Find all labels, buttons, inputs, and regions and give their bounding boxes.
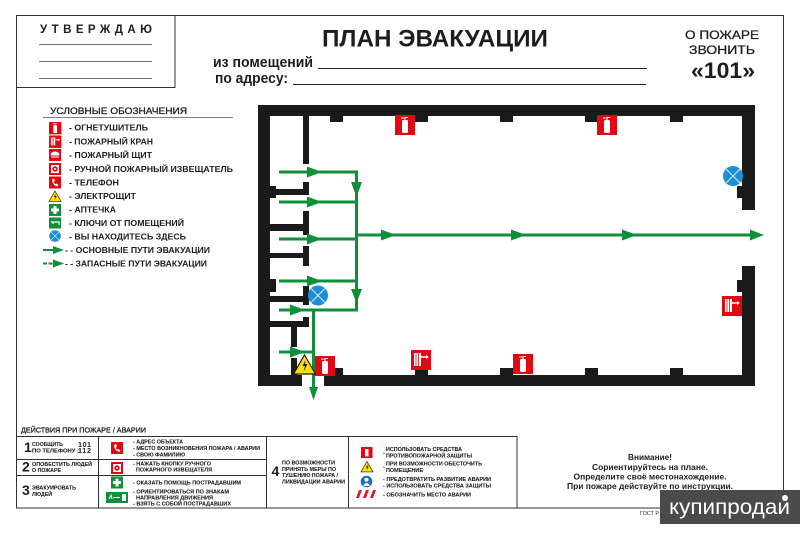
attention note: [567, 452, 733, 491]
step 4 measures: ПРОТИВОПОЖАРНОЙ ЗАЩИТЫ: [386, 452, 473, 460]
panel: legend: [43, 106, 233, 268]
step 3: НАПРАВЛЕНИЯ ДВИЖЕНИЯ: [136, 496, 213, 502]
legend label: extinguisher: - ОГНЕТУШИТЕЛЬ: [69, 122, 148, 132]
approval heading: УТВЕРЖДАЮ: [40, 24, 152, 36]
approval box: [16, 16, 175, 88]
step 4: ПРИНЯТЬ МЕРЫ ПО: [282, 467, 337, 473]
legend icon: electric panel: [49, 191, 61, 201]
step 4: ЛИКВИДАЦИИ АВАРИИ: [282, 479, 345, 485]
step 4: ПО ВОЗМОЖНОСТИ: [282, 460, 335, 466]
step 4 measures: ПРИ ВОЗМОЖНОСТИ ОБЕСТОЧИТЬ: [386, 462, 482, 468]
step 3: 3: [22, 482, 30, 498]
step 1: ПО ТЕЛЕФОНУ :: [32, 448, 79, 454]
legend icon: fire shield: [49, 149, 61, 161]
legend icon: main route: [43, 246, 64, 254]
legend icon: keys: [49, 218, 61, 228]
legend label: main route: - - ОСНОВНЫЕ ПУТИ ЭВАКУАЦИИ: [65, 245, 210, 255]
evacuation routes: [279, 166, 764, 400]
icon: you are here, left: [308, 286, 328, 306]
step 3: - ОРИЕНТИРОВАТЬСЯ ПО ЗНАКАМ: [133, 490, 229, 496]
subtitle fields: [213, 55, 647, 87]
step 4: 4: [272, 463, 280, 479]
step 3: ЛЮДЕЙ: [32, 490, 52, 498]
signature lines: [39, 44, 152, 78]
step 4 measures: -: [383, 464, 385, 470]
step 1: - МЕСТО ВОЗНИКНОВЕНИЯ ПОЖАРА / АВАРИИ: [133, 446, 260, 452]
icon: you are here, right: [723, 166, 743, 186]
arrowheads: main exit route: [381, 230, 764, 240]
attention note: При пожаре действуйте по инструкции.: [567, 481, 733, 491]
fire phone callout: [685, 30, 759, 83]
step 1: - АДРЕС ОБЪЕКТА: [133, 440, 183, 446]
legend icon: first aid: [49, 204, 61, 216]
step 4 measures: - ОБОЗНАЧИТЬ МЕСТО АВАРИИ: [383, 492, 471, 498]
step 2: 2: [22, 458, 30, 474]
step 4 measures: - ПРЕДОТВРАТИТЬ РАЗВИТИЕ АВАРИИ: [383, 477, 491, 483]
title: ПЛАН ЭВАКУАЦИИ: [322, 26, 548, 52]
arrowheads: room exits: [290, 166, 322, 358]
legend label: keys: - КЛЮЧИ ОТ ПОМЕЩЕНИЙ: [69, 217, 184, 228]
floor plan walls: [258, 105, 755, 386]
icon: extinguisher top 1: [395, 115, 415, 135]
icon: hydrant right: [722, 296, 742, 316]
step 1: 1: [24, 439, 32, 455]
step 2: ПОЖАРНОГО ИЗВЕЩАТЕЛЯ: [136, 468, 212, 474]
legend label: you are here: - ВЫ НАХОДИТЕСЬ ЗДЕСЬ: [69, 232, 186, 242]
icon: electric panel: [294, 355, 316, 374]
step 3: - ВЗЯТЬ С СОБОЙ ПОСТРАДАВШИХ: [133, 500, 231, 508]
watermark: [660, 490, 800, 524]
panel: fire actions table: [16, 426, 517, 508]
attention note: Сориентируйтесь на плане.: [592, 462, 708, 472]
legend label: first aid: - АПТЕЧКА: [69, 204, 116, 214]
step 4: ТУШЕНИЮ ПОЖАРА /: [282, 473, 338, 479]
step 1: 101: [78, 440, 91, 449]
legend label: hydrant: - ПОЖАРНЫЙ КРАН: [69, 136, 153, 146]
watermark: купипродаи: [669, 496, 790, 519]
step 2: [22, 458, 212, 474]
step 4 measures: ИСПОЛЬЗОВАТЬ СРЕДСТВА: [386, 447, 462, 453]
legend icon: reserve route: [43, 260, 64, 268]
fire phone callout: О ПОЖАРЕ: [685, 30, 759, 42]
step 4 measures: - ИСПОЛЬЗОВАТЬ СРЕДСТВА ЗАЩИТЫ: [383, 483, 491, 489]
subtitle fields: по адресу:: [215, 71, 288, 87]
step 3: ЭВАКУИРОВАТЬ: [32, 486, 76, 492]
legend icon: phone: [49, 176, 61, 188]
step 3: - ОКАЗАТЬ ПОМОЩЬ ПОСТРАДАВШИМ: [133, 480, 241, 486]
legend icon: hydrant: [49, 136, 61, 148]
table grid: [16, 436, 517, 508]
standard reference: ГОСТ Р: [640, 511, 659, 517]
legend icon: you are here: [49, 230, 61, 242]
step 1: - СВОЮ ФАМИЛИЮ: [133, 452, 185, 458]
legend label: reserve route: - - ЗАПАСНЫЕ ПУТИ ЭВАКУАЦИИ: [65, 258, 207, 268]
step 4: [272, 460, 345, 485]
legend label: fire shield: - ПОЖАРНЫЙ ЩИТ: [69, 149, 153, 160]
step 3: [22, 476, 241, 508]
step 4 measures: ПОМЕЩЕНИЕ: [386, 468, 423, 474]
legend heading: УСЛОВНЫЕ ОБОЗНАЧЕНИЯ: [50, 106, 187, 117]
icon: extinguisher at exit: [315, 356, 335, 376]
fire phone callout: «101»: [691, 58, 755, 83]
legend label: electric panel: - ЭЛЕКТРОЩИТ: [69, 191, 137, 201]
step 4 measures: -: [383, 450, 385, 456]
attention note: Определите своё местонахождение.: [574, 472, 726, 482]
subtitle fields: из помещений: [213, 55, 313, 71]
icon: hydrant bottom: [411, 350, 431, 370]
step 1: [24, 439, 260, 458]
step 1: 112: [78, 446, 91, 455]
legend icon: extinguisher: [49, 122, 61, 134]
icon: extinguisher bottom: [513, 354, 533, 374]
legend icon: alarm: [49, 163, 61, 175]
legend label: alarm: - РУЧНОЙ ПОЖАРНЫЙ ИЗВЕЩАТЕЛЬ: [69, 163, 233, 174]
step 2: - НАЖАТЬ КНОПКУ РУЧНОГО: [133, 462, 212, 468]
table heading: ДЕЙСТВИЯ ПРИ ПОЖАРЕ / АВАРИИ: [21, 426, 146, 434]
legend label: phone: - ТЕЛЕФОН: [69, 178, 119, 188]
step 4 measures: [356, 447, 491, 498]
fire phone callout: ЗВОНИТЬ: [689, 45, 755, 57]
step 2: ОПОВЕСТИТЬ ЛЮДЕЙ: [32, 460, 92, 468]
step 2: О ПОЖАРЕ: [32, 468, 61, 474]
icon: extinguisher top 2: [597, 115, 617, 135]
attention note: Внимание!: [628, 452, 672, 462]
step 1: СООБЩИТЬ: [32, 442, 63, 448]
arrowheads: corridor: [309, 182, 362, 400]
